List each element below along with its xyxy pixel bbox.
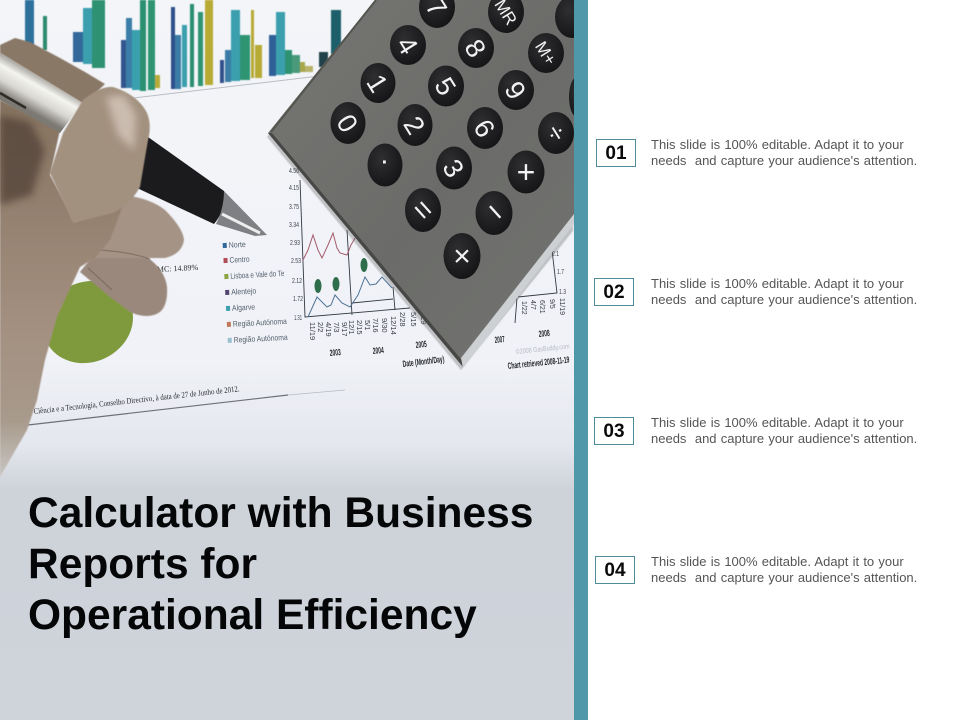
calculator key labels: M+ xyxy=(531,38,560,69)
line chart on the report: 2005 xyxy=(415,339,427,350)
calculator key labels: 1 xyxy=(360,69,394,98)
legend on the report: Lisboa e Vale do Te xyxy=(230,269,285,281)
calculator key labels: − xyxy=(476,193,515,231)
report notes: MC: 14.89% xyxy=(157,263,199,274)
title: Calculator with Business xyxy=(28,490,533,537)
pen grip xyxy=(137,137,224,224)
photo: calculator, pen and hand on business reports xyxy=(0,0,574,720)
line chart on the report: 9/30 xyxy=(380,318,389,333)
hand holding pen xyxy=(0,38,267,477)
report notes: Ciência e a Tecnologia, Conselho Directivo, à data de 27 de Junho de 2012. xyxy=(33,384,240,416)
upper hand xyxy=(0,38,105,104)
text 04: needs and capture your audience's attention. xyxy=(651,570,917,585)
line chart on the report: 3.34 xyxy=(289,222,299,229)
right chart fragment: 1.7 xyxy=(557,269,564,276)
calculator xyxy=(267,0,589,370)
number 04: 04 xyxy=(604,560,626,581)
text 04 xyxy=(651,554,917,585)
line chart on the report: 1.72 xyxy=(293,296,303,303)
right chart fragment: 11/19 xyxy=(558,298,565,315)
item 02 xyxy=(594,276,917,307)
line chart on the report: 2/15 xyxy=(355,320,364,335)
line chart on the report xyxy=(289,168,445,369)
legend on the report: Centro xyxy=(229,255,250,265)
line chart on the report: 12/14 xyxy=(389,316,398,335)
text 03 xyxy=(651,415,917,446)
calculator key labels xyxy=(330,0,573,273)
teal vertical bar xyxy=(574,0,588,720)
line chart on the report: 12/1 xyxy=(347,320,356,335)
line chart on the report: 2.12 xyxy=(292,278,302,285)
palm shadow xyxy=(0,115,45,205)
hand back and wrist xyxy=(0,100,125,477)
text 01: This slide is 100% editable. Adapt it to your xyxy=(651,137,904,152)
text 03: This slide is 100% editable. Adapt it to your xyxy=(651,415,904,430)
line chart on the report: 5/15 xyxy=(409,312,418,327)
line chart on the report: 5/1 xyxy=(363,320,372,330)
number 01: 01 xyxy=(605,143,627,164)
finger creases xyxy=(88,250,150,290)
line chart on the report: 2.93 xyxy=(290,240,300,247)
line chart on the report: 2003 xyxy=(329,347,341,358)
calculator key labels: × xyxy=(453,240,471,273)
text 04: This slide is 100% editable. Adapt it to your xyxy=(651,554,904,569)
right chart fragment: 2008 xyxy=(538,328,550,339)
line chart on the report: 3.75 xyxy=(289,204,299,211)
calculator key labels: = xyxy=(405,193,441,228)
right chart fragment: 2.1 xyxy=(552,251,559,258)
legend on the report: Algarve xyxy=(232,302,256,313)
calculator key labels: 0 xyxy=(330,109,364,138)
report notes xyxy=(33,263,240,416)
item 04 xyxy=(595,554,917,585)
thumb xyxy=(50,87,150,223)
title xyxy=(28,490,533,639)
right chart fragment: 4/7 xyxy=(529,300,536,310)
number 01 xyxy=(596,139,636,167)
right chart fragment: 2007 xyxy=(494,334,505,345)
line chart on the report: 4.15 xyxy=(289,185,299,192)
text 03: needs and capture your audience's attention. xyxy=(651,431,917,446)
line chart on the report: 2004 xyxy=(372,345,384,356)
text 01: needs and capture your audience's attention. xyxy=(651,153,917,168)
calculator key labels: 9 xyxy=(498,76,532,105)
calculator key labels: 5 xyxy=(428,72,462,101)
report divider lines xyxy=(28,70,370,425)
item 03 xyxy=(594,415,917,446)
line chart on the report: 2.53 xyxy=(291,258,301,265)
line chart on the report: 9/17 xyxy=(340,322,349,337)
calculator key labels: 8 xyxy=(458,34,492,63)
legend on the report: Região Autónoma xyxy=(233,333,288,345)
text 01 xyxy=(651,137,917,168)
text 02 xyxy=(651,276,917,307)
right chart fragment: 6/21 xyxy=(538,300,545,314)
number 02: 02 xyxy=(603,282,625,303)
legend on the report: Região Autónoma xyxy=(233,317,288,329)
line chart on the report: 2/28 xyxy=(398,312,407,327)
right chart fragment: 1.3 xyxy=(559,289,566,296)
legend on the report: Norte xyxy=(229,240,246,250)
pen tip xyxy=(216,191,267,236)
line chart on the report: Date (Month/Day) xyxy=(402,354,445,369)
calculator key labels: · xyxy=(382,152,388,174)
text 02: This slide is 100% editable. Adapt it to your xyxy=(651,276,904,291)
calculator key labels: 6 xyxy=(467,114,501,143)
line chart on the report: 7/16 xyxy=(371,318,380,333)
line chart on the report: 4.56 xyxy=(289,168,299,175)
line chart on the report: 11/19 xyxy=(308,322,317,340)
right chart fragment: 1/22 xyxy=(520,301,527,315)
text 02: needs and capture your audience's attention. xyxy=(651,292,917,307)
line chart on the report: 7/29 xyxy=(419,310,428,325)
calculator key labels: ÷ xyxy=(539,119,573,147)
number 04 xyxy=(595,556,635,584)
number 02 xyxy=(594,278,634,306)
right chart fragment: 9/5 xyxy=(548,299,555,309)
calculator key labels: 4 xyxy=(390,31,424,60)
bar chart on the report xyxy=(25,0,341,91)
first finger xyxy=(95,195,184,258)
line chart on the report: 2/2 xyxy=(316,322,325,332)
line chart on the report: 4/19 xyxy=(324,322,333,337)
item 01 xyxy=(596,137,917,168)
pie chart slice xyxy=(29,266,147,378)
calculator key labels: + xyxy=(517,154,535,190)
thumb nail xyxy=(106,95,136,150)
right chart fragment xyxy=(494,250,570,371)
title: Operational Efficiency xyxy=(28,592,477,639)
calculator key labels: 3 xyxy=(436,154,470,183)
second finger xyxy=(80,247,167,316)
calculator keys xyxy=(330,0,589,279)
line chart on the report: 7/3 xyxy=(332,322,341,332)
line chart on the report: 1.31 xyxy=(294,315,302,322)
legend on the report: Alentejo xyxy=(231,286,257,297)
number 03: 03 xyxy=(603,421,625,442)
legend on the report xyxy=(223,238,288,345)
calculator key labels: 2 xyxy=(397,111,431,140)
number 03 xyxy=(594,417,634,445)
pen barrel xyxy=(0,53,82,133)
title: Reports for xyxy=(28,541,257,588)
